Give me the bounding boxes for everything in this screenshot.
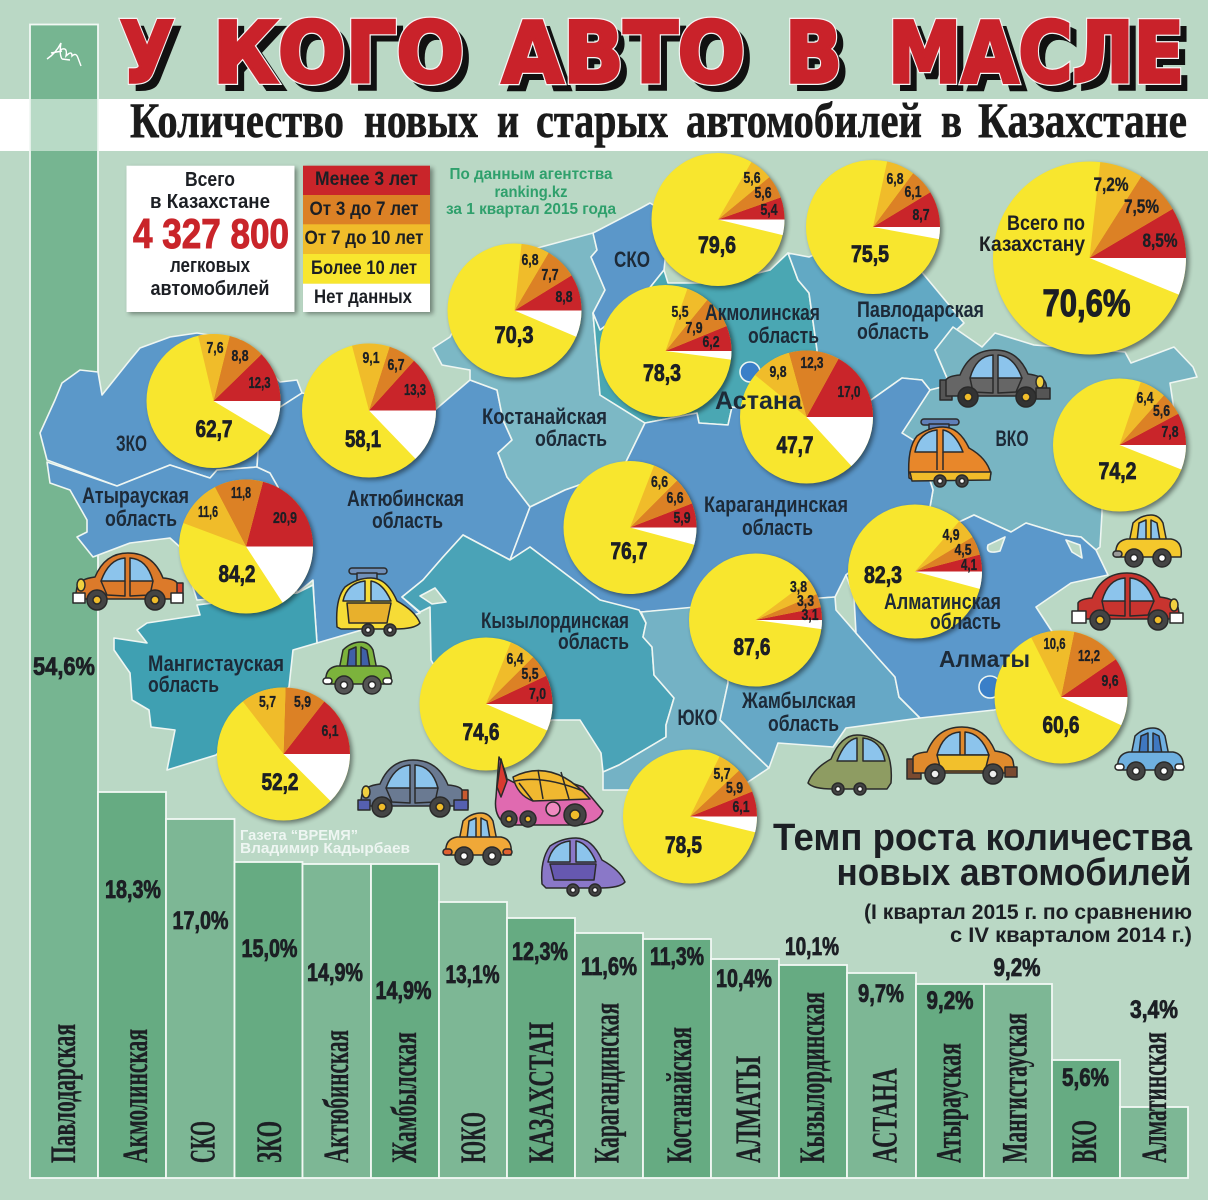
pie: Karaganda — [564, 461, 699, 596]
map of Kazakhstan — [40, 203, 1197, 830]
bar value labels: 9,2% — [926, 987, 974, 1015]
region labels: Астана — [715, 387, 803, 415]
pie: Pavlodar: 75,5 — [851, 241, 889, 268]
region: Pavlodar — [788, 240, 964, 420]
pie: Kostanay — [448, 244, 584, 380]
pie: Astana: 12,3 — [800, 355, 824, 372]
pie: Karaganda: 6,6 — [651, 474, 668, 491]
bar region names: КАЗАХСТАН — [521, 1022, 561, 1163]
bar region names: АСТАНА — [864, 1068, 904, 1163]
subtitle: и — [497, 92, 519, 148]
icon: orange car with rack — [909, 419, 991, 487]
bar region names: Костанайская — [659, 1027, 699, 1163]
pie: Zhambyl — [689, 554, 824, 689]
region: Zhambyl — [720, 597, 920, 768]
pie: Atyrau: 11,8 — [231, 485, 251, 502]
pie: Kyzylorda: 5,5 — [522, 666, 539, 683]
subtitle: Количество — [130, 92, 344, 148]
pie: Zhambyl: 87,6 — [734, 634, 770, 661]
region labels: ЮКО — [678, 705, 718, 730]
pie: Akmola: 6,2 — [702, 334, 720, 351]
bar region names: Алматинская — [1134, 1032, 1174, 1163]
panel: total cars: легковых — [170, 255, 250, 277]
region labels: область — [857, 319, 929, 344]
icon: grey-blue sedan — [358, 760, 468, 817]
icon: green small car — [323, 642, 392, 694]
pie: Almaty oblast: 4,9 — [942, 527, 960, 544]
legend: Нет данных — [314, 287, 412, 308]
chart subheading: (I квартал 2015 г. по сравнению — [864, 901, 1192, 924]
pie: Akmola — [600, 285, 734, 420]
bar region names: Акмолинская — [115, 1029, 155, 1163]
bar value labels: 14,9% — [307, 959, 363, 987]
credit — [240, 827, 410, 857]
pie: South Kazakhstan: 78,5 — [665, 832, 702, 859]
pie: Mangystau: 52,2 — [262, 769, 298, 796]
title — [120, 4, 1191, 109]
chart heading: Темп роста количества — [773, 817, 1193, 859]
pie: Almaty city: 12,2 — [1078, 648, 1100, 665]
total value: 4 327 800 — [133, 210, 289, 257]
pie: East Kazakhstan: 5,6 — [1153, 403, 1170, 420]
subtitle: в — [941, 92, 962, 148]
pie: Atyrau: 84,2 — [218, 561, 256, 588]
region labels: ЗКО — [116, 431, 147, 456]
region labels: область — [148, 672, 219, 697]
bar value labels: 11,6% — [581, 953, 637, 981]
title: АВТО — [502, 4, 745, 102]
panel: total cars: Всего — [185, 169, 235, 191]
region labels: область — [535, 426, 607, 451]
pie: Atyrau: 11,6 — [198, 504, 218, 521]
pie: Akmola: 7,9 — [686, 320, 703, 337]
bar value labels: 3,4% — [1130, 996, 1178, 1024]
icon: orange-yellow sedan — [907, 727, 1017, 784]
chart subheading — [864, 901, 1192, 947]
pie: Aktobe: 13,3 — [404, 382, 426, 399]
title: КОГО — [213, 4, 464, 102]
bar value labels: 9,7% — [858, 980, 904, 1008]
pie: Kostanay: 7,7 — [542, 267, 559, 284]
pie: Kyzylorda: 6,4 — [506, 651, 524, 668]
region labels: Мангистауская — [148, 651, 284, 676]
pie: Astana: 9,8 — [770, 364, 787, 381]
title: В — [785, 4, 842, 102]
region labels: область — [930, 609, 1001, 634]
region labels: Костанайская — [482, 404, 607, 429]
pie: Kazakhstan total — [979, 162, 1189, 357]
pie: Mangystau: 5,9 — [294, 694, 311, 711]
source note: за 1 квартал 2015 года — [446, 201, 616, 218]
panel: total cars: в Казахстане — [150, 191, 270, 213]
region: Kostanay — [433, 233, 645, 507]
pie: Pavlodar: 6,1 — [904, 184, 922, 201]
pie: Zhambyl: 3,1 — [802, 607, 819, 624]
pie: Aktobe: 58,1 — [345, 426, 381, 453]
pie: Almaty city: 60,6 — [1042, 712, 1080, 739]
pie: Kostanay: 8,8 — [556, 289, 573, 306]
icon: yellow small car — [1113, 515, 1181, 567]
icon: grey sedan — [940, 350, 1050, 407]
pie: Astana: 47,7 — [776, 432, 814, 459]
bar value labels: 17,0% — [172, 907, 228, 935]
bar region names: ВКО — [1064, 1120, 1104, 1163]
title: У — [127, 11, 181, 109]
pie: Karaganda: 6,6 — [666, 490, 684, 507]
pie: Atyrau: 20,9 — [273, 510, 297, 527]
pie: Almaty city: 9,6 — [1102, 673, 1119, 690]
title: АВТО — [502, 4, 745, 102]
source note: ranking.kz — [494, 184, 568, 201]
bar value labels: 14,9% — [376, 977, 432, 1005]
pie: Pavlodar: 8,7 — [912, 207, 930, 224]
source note: По данным агентства — [450, 166, 613, 183]
pie: East Kazakhstan: 74,2 — [1098, 458, 1136, 485]
bar value labels: 18,3% — [105, 876, 161, 904]
pie: Kazakhstan total: 7,2% — [1094, 175, 1129, 196]
credit: Владимир Кадырбаев — [240, 840, 410, 857]
region: Karaganda — [510, 378, 933, 612]
title: АВТО — [509, 11, 752, 109]
title: В — [792, 11, 849, 109]
icon: olive car — [808, 735, 891, 795]
pie: Mangystau — [217, 688, 352, 823]
pie: Astana — [740, 350, 876, 486]
region labels: СКО — [614, 247, 650, 272]
pie: Kazakhstan total: 70,6% — [1042, 283, 1130, 325]
pie: Kazakhstan total: 8,5% — [1142, 231, 1178, 252]
pie: Mangystau: 5,7 — [259, 694, 276, 711]
pie: North Kazakhstan: 5,4 — [760, 202, 778, 219]
chart heading — [773, 817, 1193, 894]
title: У — [120, 4, 174, 102]
bar region names: Карагандинская — [586, 1003, 626, 1163]
title: В — [785, 4, 842, 102]
region labels: Акмолинская — [705, 300, 820, 325]
icon: blue small car — [1115, 728, 1184, 780]
bar value labels: 9,2% — [994, 954, 1040, 982]
pie: Kostanay: 6,8 — [522, 252, 539, 269]
credit: Газета “ВРЕМЯ” — [240, 827, 358, 844]
pie: Pavlodar — [806, 160, 942, 296]
pie: East Kazakhstan: 7,8 — [1162, 424, 1179, 441]
pie: North Kazakhstan — [652, 153, 787, 288]
subtitle: старых — [536, 92, 668, 148]
legend: От 3 до 7 лет — [310, 199, 418, 220]
bar value labels: 5,6% — [1062, 1064, 1109, 1092]
region labels: Алматы — [939, 646, 1030, 672]
Aral sea — [420, 588, 446, 604]
legend — [303, 166, 433, 314]
bar value labels — [33, 653, 1178, 1092]
region: Mangystau — [114, 585, 317, 770]
pie: West Kazakhstan: 12,3 — [248, 375, 271, 392]
pie: West Kazakhstan: 8,8 — [232, 348, 249, 365]
bar region names: ЗКО — [249, 1121, 289, 1163]
title: КОГО — [213, 4, 464, 102]
region labels: область — [558, 629, 629, 654]
bar region names — [43, 992, 1174, 1163]
bar region names: Павлодарская — [43, 1024, 83, 1163]
bar region names: Атырауская — [928, 1043, 968, 1163]
region labels: Актюбинская — [347, 486, 464, 511]
pie: North Kazakhstan: 5,6 — [754, 185, 772, 202]
region: Almaty oblast — [846, 507, 1108, 718]
pie: Almaty oblast — [848, 504, 984, 641]
region labels: Атырауская — [82, 483, 189, 508]
icon: red sedan — [1072, 573, 1183, 630]
Almaty dot — [979, 676, 1001, 698]
bar region names: СКО — [182, 1121, 222, 1163]
pie: Almaty oblast: 4,5 — [954, 542, 972, 559]
bar region names: Жамбылская — [384, 1032, 424, 1163]
bar value labels: 11,3% — [650, 943, 704, 971]
pie: Karaganda: 76,7 — [610, 538, 648, 565]
region labels: Жамбылская — [741, 688, 856, 713]
pie: Karaganda: 5,9 — [674, 510, 691, 527]
legend: Более 10 лет — [311, 258, 417, 279]
region: South Kazakhstan — [603, 604, 769, 830]
region labels — [82, 247, 1030, 736]
pie: West Kazakhstan: 62,7 — [196, 416, 232, 443]
pie: South Kazakhstan: 5,7 — [714, 766, 731, 783]
region: North Kazakhstan — [591, 203, 670, 330]
bar value labels: 12,3% — [512, 938, 568, 966]
region labels: область — [768, 711, 839, 736]
region: Akmola — [593, 253, 820, 425]
region: East Kazakhstan — [902, 327, 1197, 550]
icon: yellow car with rack — [337, 568, 420, 636]
bar region names: АЛМАТЫ — [728, 1056, 768, 1163]
pie: South Kazakhstan: 6,1 — [732, 799, 750, 816]
legend: От 7 до 10 лет — [304, 228, 424, 249]
chart subheading: с IV кварталом 2014 г.) — [950, 924, 1192, 947]
icon: purple car — [542, 838, 625, 896]
pie: Kazakhstan total: 7,5% — [1124, 197, 1159, 218]
bar region names: Актюбинская — [316, 1030, 356, 1163]
panel: total cars — [126, 166, 297, 314]
pie: Aktobe: 9,1 — [362, 350, 380, 367]
icon: orange small car — [443, 813, 512, 865]
bar region names: ЮКО — [453, 1112, 493, 1163]
pie: West Kazakhstan: 7,6 — [206, 340, 224, 357]
region labels: Кызылординская — [481, 608, 629, 633]
pie: Akmola: 78,3 — [643, 360, 681, 387]
pie: Pavlodar: 6,8 — [886, 171, 904, 188]
subtitle: новых — [364, 92, 478, 148]
bar region names: Кызылординская — [792, 992, 832, 1163]
pie: Kyzylorda: 74,6 — [462, 719, 500, 746]
region labels: Павлодарская — [857, 297, 984, 322]
bar value labels: 13,1% — [446, 961, 500, 989]
pie: Kazakhstan total: Казахстану — [979, 233, 1085, 256]
title: У — [120, 4, 174, 102]
pie: East Kazakhstan — [1053, 378, 1188, 514]
pie: Kyzylorda — [420, 638, 555, 773]
region: ZKO — [40, 333, 302, 486]
pie: North Kazakhstan: 79,6 — [698, 232, 736, 259]
region labels: область — [372, 508, 443, 533]
region labels: ВКО — [996, 426, 1028, 451]
pie: Kostanay: 70,3 — [494, 322, 534, 349]
pie: Astana: 17,0 — [838, 384, 861, 401]
bar value labels: 10,4% — [716, 965, 772, 993]
pie: Almaty city — [994, 630, 1130, 766]
icon: signature — [47, 43, 81, 66]
title: КОГО — [220, 11, 471, 109]
bar region names: Мангистауская — [994, 1013, 1034, 1163]
region: Aktobe — [257, 380, 530, 643]
Balkhash lake — [988, 537, 1082, 558]
region: Atyrau — [47, 462, 313, 600]
pie: Almaty oblast: 4,1 — [961, 557, 977, 574]
region: Kyzylorda — [402, 535, 674, 772]
pie: South Kazakhstan — [623, 750, 760, 886]
pie: East Kazakhstan: 6,4 — [1136, 390, 1154, 407]
icon: orange sedan — [73, 553, 183, 610]
region labels: область — [742, 515, 813, 540]
panel: total cars: автомобилей — [150, 278, 270, 300]
Astana dot — [740, 362, 760, 382]
pie: Zhambyl: 3,3 — [797, 593, 814, 610]
icon: pink turtle car — [495, 757, 603, 827]
pie: North Kazakhstan: 5,6 — [744, 170, 761, 187]
pie: Almaty city: 10,6 — [1044, 636, 1066, 653]
region labels: область — [748, 323, 819, 348]
pie: Mangystau: 6,1 — [322, 723, 339, 740]
pie: Kazakhstan total: Всего по — [1007, 212, 1085, 235]
bar value labels: 10,1% — [785, 933, 839, 961]
pie: Aktobe — [302, 344, 438, 480]
pie: Aktobe: 6,7 — [388, 357, 405, 374]
pie: Zhambyl: 3,8 — [790, 579, 807, 596]
bar value labels: 15,0% — [242, 935, 298, 963]
legend: Менее 3 лет — [315, 169, 418, 190]
pie: Almaty oblast: 82,3 — [864, 562, 902, 589]
region labels: Алматинская — [884, 589, 1001, 614]
subtitle: автомобилей — [686, 92, 922, 148]
pie: South Kazakhstan: 5,9 — [726, 780, 743, 797]
region labels: Карагандинская — [704, 492, 848, 517]
pie: Atyrau — [179, 480, 316, 616]
pie: West Kazakhstan — [146, 334, 283, 470]
bar value labels: 54,6% — [33, 653, 95, 681]
pie: Akmola: 5,5 — [672, 304, 689, 321]
pie: Kyzylorda: 7,0 — [529, 686, 546, 703]
source note — [446, 166, 616, 218]
region labels: область — [105, 506, 177, 531]
subtitle — [130, 92, 1187, 148]
